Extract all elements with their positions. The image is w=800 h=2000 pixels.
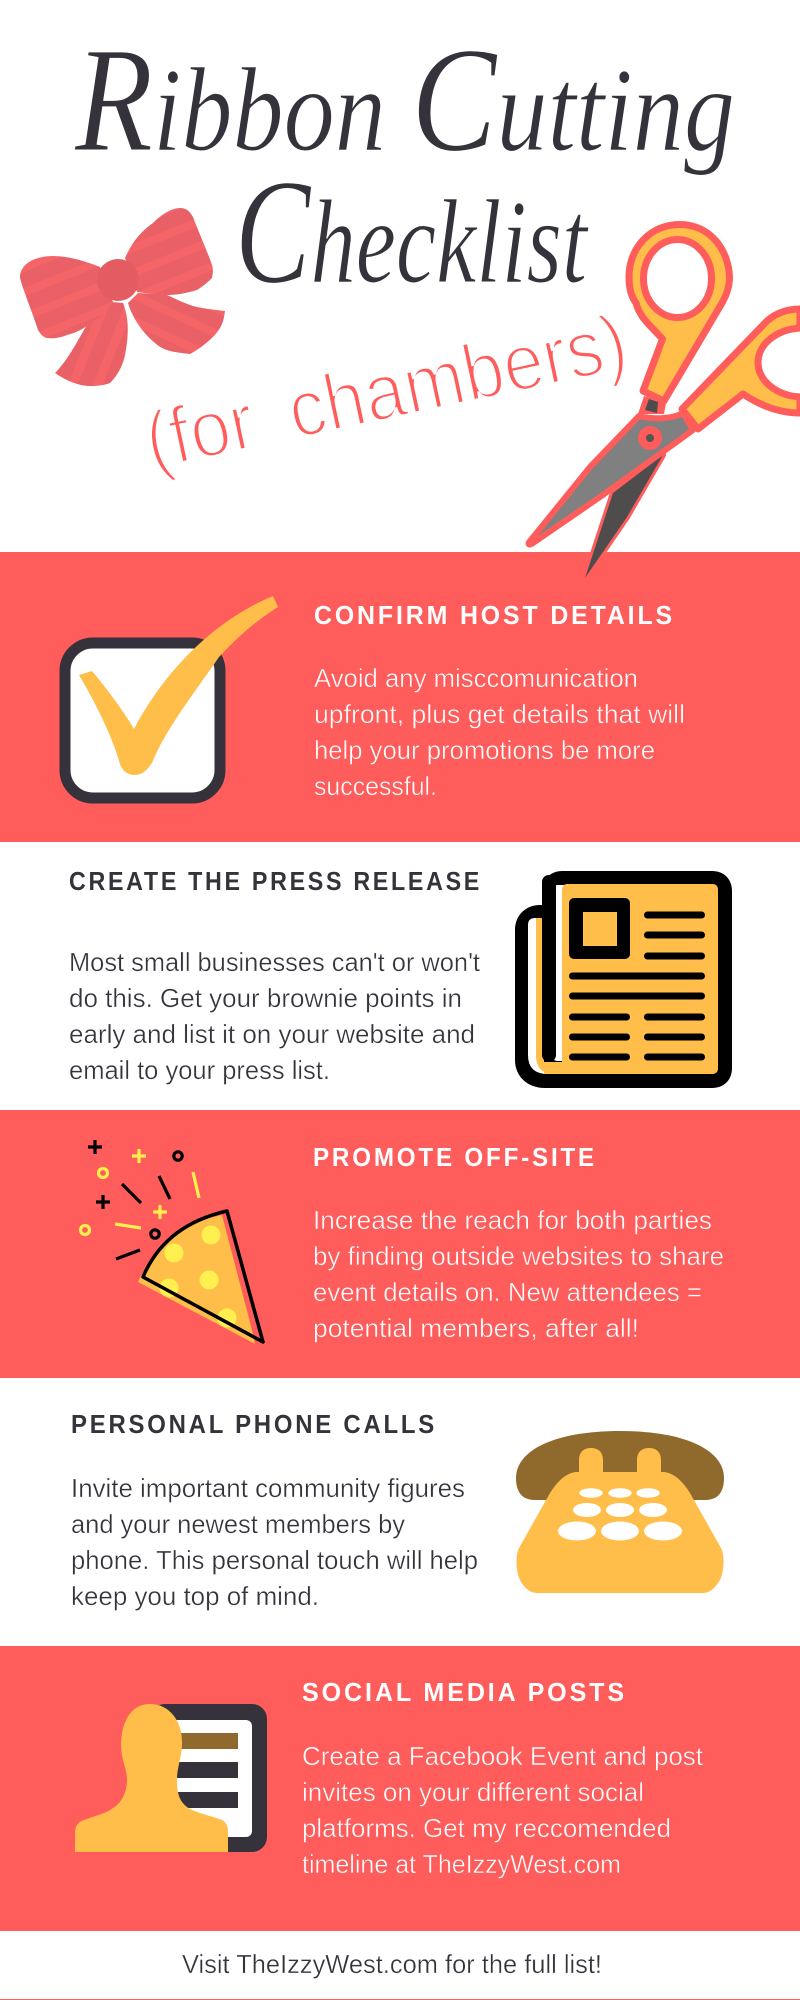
- heading: PROMOTE OFF-SITE: [313, 1142, 597, 1172]
- body text: timeline at TheIzzyWest.com: [302, 1849, 621, 1879]
- body text: Create a Facebook Event and post: [302, 1741, 704, 1771]
- body text: event details on. New attendees =: [313, 1277, 702, 1307]
- body text: [302, 1741, 704, 1879]
- body text: Most small businesses can't or won't: [69, 947, 481, 977]
- panel: create the press release: [69, 866, 732, 1088]
- body text: [313, 1205, 724, 1343]
- body text: by finding outside websites to share: [313, 1241, 724, 1271]
- body text: Invite important community figures: [71, 1473, 465, 1503]
- footer text: Visit TheIzzyWest.com for the full list!: [182, 1949, 602, 1979]
- body text: do this. Get your brownie points in: [69, 983, 462, 1013]
- icon: checkbox: [65, 643, 220, 798]
- panel: social media posts: [0, 1646, 800, 1931]
- body text: Avoid any misccomunication: [314, 663, 638, 693]
- body text: help your promotions be more: [314, 735, 655, 765]
- icon: telephone: [516, 1431, 724, 1593]
- body text: upfront, plus get details that will: [314, 699, 685, 729]
- body text: platforms. Get my reccomended: [302, 1813, 671, 1843]
- title: Ribbon Cutting: Ribbon Cutting: [74, 17, 735, 183]
- body text: invites on your different social: [302, 1777, 644, 1807]
- icon: scissors: [529, 224, 800, 578]
- icon: party popper: [80, 1140, 263, 1344]
- body text: successful.: [314, 771, 437, 801]
- heading: SOCIAL MEDIA POSTS: [302, 1677, 627, 1707]
- body text: email to your press list.: [69, 1055, 330, 1085]
- body text: keep you top of mind.: [71, 1581, 319, 1611]
- body text: [314, 663, 685, 801]
- panel: personal phone calls: [71, 1409, 724, 1611]
- title: Checklist: Checklist: [235, 149, 589, 315]
- icon: red bow: [20, 208, 225, 386]
- icon: check mark: [79, 596, 278, 775]
- heading: CREATE THE PRESS RELEASE: [69, 866, 482, 896]
- body text: [71, 1473, 478, 1611]
- body text: and your newest members by: [71, 1509, 405, 1539]
- panel: promote off-site: [0, 1110, 800, 1378]
- heading: CONFIRM HOST DETAILS: [314, 600, 675, 630]
- body text: [69, 947, 481, 1085]
- heading: PERSONAL PHONE CALLS: [71, 1409, 437, 1439]
- body text: potential members, after all!: [313, 1313, 639, 1343]
- icon: newspaper: [515, 871, 732, 1088]
- body text: Increase the reach for both parties: [313, 1205, 712, 1235]
- panel: confirm host details: [0, 552, 800, 842]
- body text: phone. This personal touch will help: [71, 1545, 478, 1575]
- body text: early and list it on your website and: [69, 1019, 475, 1049]
- subtitle: for chambers: (for chambers): [137, 297, 635, 486]
- icon: profile card: [75, 1704, 267, 1852]
